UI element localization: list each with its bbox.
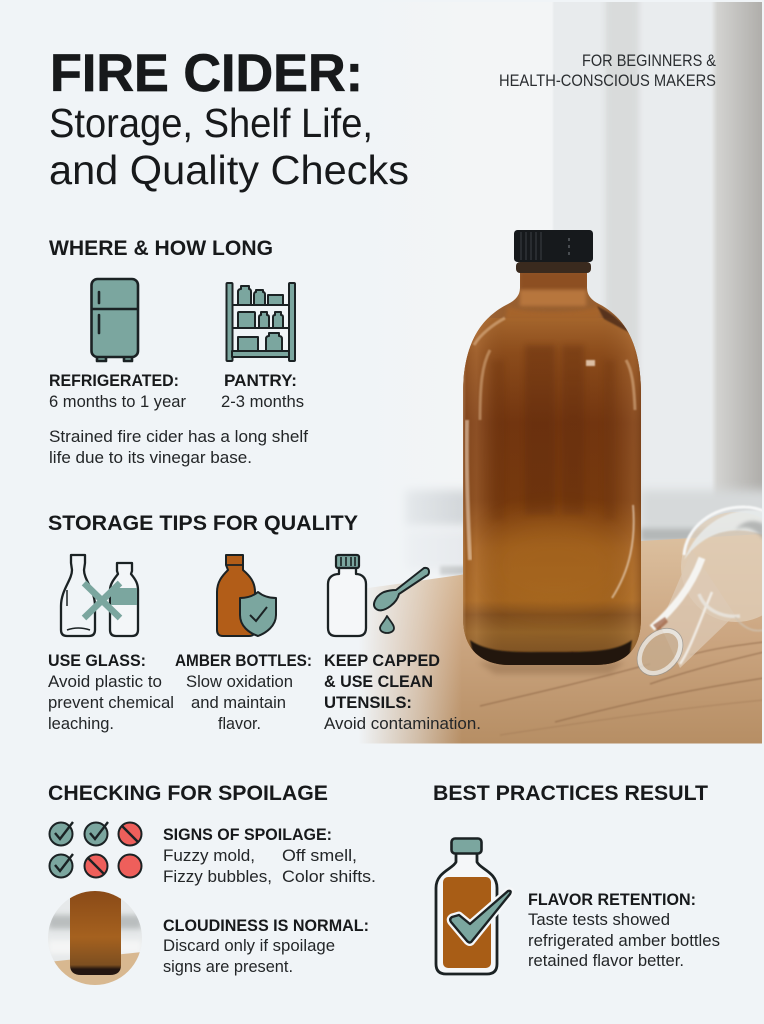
text: flavor retention bbox=[528, 890, 720, 970]
black screw cap bbox=[514, 230, 593, 262]
text: flavor retention: Taste tests showed bbox=[528, 910, 670, 929]
text: cloudiness is normal: CLOUDINESS IS NORMAL: bbox=[163, 916, 369, 935]
text: signs of spoilage: Fuzzy mold, bbox=[163, 846, 255, 865]
audience tag bbox=[499, 51, 717, 90]
text: cloudiness is normal: Discard only if spoilage bbox=[163, 936, 335, 955]
label: pantry: 2-3 months bbox=[221, 392, 304, 411]
icon: amber bottle with shield bbox=[217, 555, 276, 636]
tip: use glass bbox=[48, 651, 174, 733]
clear glass flask lying on table bbox=[636, 505, 762, 676]
heading: where and how long: WHERE & HOW LONG bbox=[49, 236, 273, 260]
title block bbox=[49, 44, 409, 193]
text: signs of spoilage: Color shifts. bbox=[282, 867, 376, 886]
title block: and Quality Checks bbox=[49, 147, 409, 193]
label: refrigerated: REFRIGERATED: bbox=[49, 371, 179, 390]
icon: capped bottle, spoon and drop bbox=[328, 555, 429, 636]
panel: where and how long bbox=[49, 236, 308, 467]
tip: keep capped bbox=[324, 651, 481, 733]
panel: storage tips bbox=[48, 511, 481, 733]
tip: use glass: Avoid plastic to bbox=[48, 672, 162, 691]
photo: amber bottle on wood table by window bbox=[340, 0, 764, 744]
wood table bbox=[340, 534, 764, 744]
photo: cloudy bottle close-up bbox=[48, 891, 142, 985]
tip: amber bottles: and maintain bbox=[191, 693, 286, 712]
icon: refrigerator bbox=[92, 279, 138, 361]
bottle body bbox=[460, 262, 645, 668]
icon: pantry shelf bbox=[226, 283, 295, 361]
tip: amber bottles bbox=[175, 651, 312, 733]
icon: glass vs plastic bottle bbox=[61, 555, 138, 636]
tip: use glass: prevent chemical bbox=[48, 693, 174, 712]
tip: amber bottles: flavor. bbox=[218, 714, 261, 733]
text: flavor retention: refrigerated amber bottles bbox=[528, 931, 720, 950]
shelf life note bbox=[49, 427, 308, 467]
heading: storage tips: STORAGE TIPS FOR QUALITY bbox=[48, 511, 358, 535]
panel: best practices result bbox=[433, 781, 720, 974]
tip: keep capped: Avoid contamination. bbox=[324, 714, 481, 733]
tip: keep capped: & USE CLEAN bbox=[324, 672, 433, 691]
amber glass bottle bbox=[460, 230, 645, 668]
label: refrigerated: 6 months to 1 year bbox=[49, 392, 186, 411]
title block: Storage, Shelf Life, bbox=[49, 100, 373, 146]
audience tag: FOR BEGINNERS & bbox=[582, 51, 717, 70]
text: cloudiness is normal: signs are present. bbox=[163, 957, 293, 976]
audience tag: HEALTH-CONSCIOUS MAKERS bbox=[499, 71, 716, 90]
shelf life note: Strained fire cider has a long shelf bbox=[49, 427, 308, 446]
icon grid: check and spoilage marks bbox=[50, 822, 142, 878]
window background bbox=[407, 2, 762, 576]
heading: best practices result: BEST PRACTICES RESULT bbox=[433, 781, 708, 805]
tip: keep capped: UTENSILS: bbox=[324, 693, 412, 712]
left fade into page bbox=[340, 491, 457, 744]
label: pantry bbox=[221, 371, 304, 411]
text: flavor retention: retained flavor better. bbox=[528, 951, 684, 970]
heading: checking for spoilage: CHECKING FOR SPOILAGE bbox=[48, 781, 328, 805]
panel: checking for spoilage bbox=[48, 781, 376, 985]
tip: keep capped: KEEP CAPPED bbox=[324, 651, 440, 670]
tip: use glass: USE GLASS: bbox=[48, 651, 146, 670]
text: cloudiness is normal bbox=[163, 916, 369, 976]
text: signs of spoilage bbox=[163, 825, 376, 886]
tip: amber bottles: AMBER BOTTLES: bbox=[175, 651, 312, 670]
text: signs of spoilage: SIGNS OF SPOILAGE: bbox=[163, 825, 332, 844]
label: refrigerated bbox=[49, 371, 186, 411]
shelf life note: life due to its vinegar base. bbox=[49, 448, 252, 467]
tip: use glass: leaching. bbox=[48, 714, 114, 733]
text: signs of spoilage: Off smell, bbox=[282, 846, 357, 865]
tip: amber bottles: Slow oxidation bbox=[186, 672, 293, 691]
text: signs of spoilage: Fizzy bubbles, bbox=[163, 867, 272, 886]
text: flavor retention: FLAVOR RETENTION: bbox=[528, 890, 696, 909]
title block: FIRE CIDER: bbox=[50, 44, 363, 103]
label: pantry: PANTRY: bbox=[224, 371, 297, 390]
icon: amber bottle with check bbox=[436, 838, 511, 974]
bottle neck ring bbox=[516, 262, 591, 273]
